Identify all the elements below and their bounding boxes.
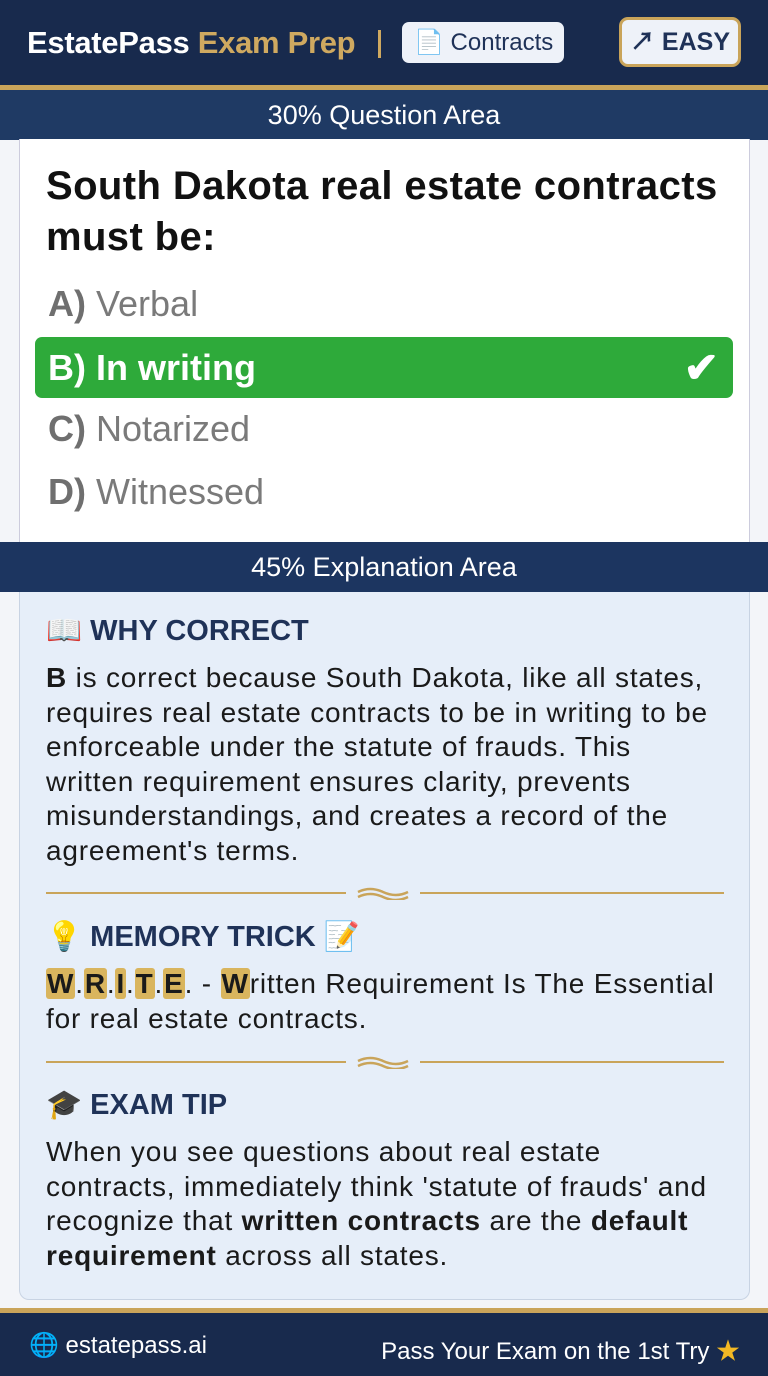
why correct text: written requirement ensures clarity, prevents [46, 766, 631, 796]
exam tip text: When you see questions about real estate [46, 1136, 601, 1167]
explanation band [0, 542, 768, 592]
option C: C) Notarized [48, 408, 250, 449]
question [46, 164, 718, 259]
memory trick text [46, 968, 715, 1034]
question card [19, 139, 750, 542]
explanation band: 45% Explanation Area [251, 552, 517, 582]
exam tip text: contracts, immediately think 'statute of frauds' and [46, 1170, 707, 1202]
why correct heading: 📖 WHY CORRECT [46, 615, 309, 647]
footer slogan: Pass Your Exam on the 1st Try ★ [381, 1338, 740, 1365]
title: EstatePass Exam Prep [27, 25, 355, 60]
why correct text: requires real estate contracts to be in writing to be [46, 696, 708, 728]
question area band: 30% Question Area [268, 100, 500, 130]
option D: D) Witnessed [48, 471, 264, 512]
category badge: 📄 Contracts [414, 29, 553, 56]
option B correct: ✔ [684, 344, 719, 391]
memory trick text: W.R.I.T.E. - Written Requirement Is The Essential [47, 968, 715, 999]
option B correct: B) In writing [48, 347, 256, 388]
footer [0, 1308, 768, 1376]
why correct text: misunderstandings, and creates a record of the [46, 800, 668, 831]
question area band [0, 90, 768, 140]
why correct text: B is correct because South Dakota, like all states, [46, 662, 703, 693]
exam tip text [46, 1136, 707, 1271]
header [0, 0, 768, 86]
footer website: 🌐 estatepass.ai [29, 1332, 207, 1359]
exam tip text: recognize that written contracts are the default [46, 1205, 688, 1236]
exam tip text: requirement across all states. [46, 1240, 448, 1270]
question: South Dakota real estate contracts [46, 164, 718, 208]
why correct text: agreement's terms. [46, 834, 299, 866]
difficulty badge [619, 17, 741, 67]
memory trick text: for real estate contracts. [46, 1002, 367, 1034]
option A: A) Verbal [48, 283, 198, 324]
why correct text [46, 662, 708, 866]
memory trick heading: 💡 MEMORY TRICK 📝 [46, 921, 360, 953]
explanation panel [19, 592, 750, 1300]
exam tip heading: 🎓 EXAM TIP [46, 1089, 227, 1121]
question: must be: [46, 215, 216, 259]
why correct text: enforceable under the statute of frauds. This [46, 731, 631, 762]
option B correct [35, 337, 733, 398]
category badge [402, 22, 564, 63]
difficulty badge: ↗ EASY [630, 28, 730, 56]
